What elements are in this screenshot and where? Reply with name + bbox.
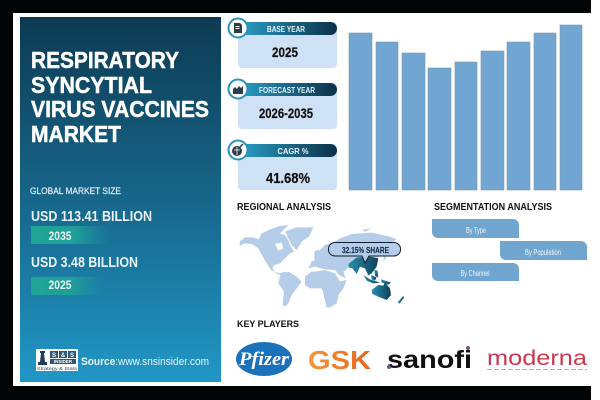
segment: by population	[500, 241, 587, 260]
world map	[240, 225, 404, 307]
logo: S&S Insider: Strategy & Stats	[37, 366, 78, 371]
year tag: 2035	[31, 226, 111, 244]
heading: segmentation analysis: SEGMENTATION ANALYSIS	[434, 201, 552, 213]
logo: S&S Insider	[36, 349, 78, 371]
card: base year: BASE YEAR	[267, 25, 305, 34]
card: forecast year	[228, 80, 337, 129]
logo: S&S Insider: S	[70, 353, 74, 359]
callout: share: 32.15% SHARE	[342, 245, 389, 255]
panel: market summary	[20, 17, 221, 382]
segment: by channel	[432, 263, 519, 281]
card: CAGR	[228, 140, 337, 190]
segment: by channel: By Channel	[460, 269, 490, 278]
logo: S&S Insider: INSIDER	[54, 359, 73, 364]
title: SYNCYTIAL	[31, 72, 152, 98]
logo: sanofi: sanofi	[387, 346, 472, 374]
value: 2035 market size: USD 113.41 BILLION	[31, 209, 152, 225]
card: base year	[228, 18, 337, 68]
logo: Pfizer: Pfizer	[238, 349, 290, 370]
segment: by population: By Population	[525, 248, 561, 257]
logo: S&S Insider: S	[52, 353, 56, 359]
card: CAGR: CAGR %	[278, 147, 308, 156]
title: VIRUS VACCINES	[31, 96, 209, 122]
year tag: 2035: 2035	[48, 229, 72, 243]
title: MARKET	[31, 121, 121, 147]
card: forecast year: FORECAST YEAR	[259, 86, 315, 95]
title	[31, 47, 209, 147]
segment: by type: By Type	[466, 226, 486, 235]
year tag: 2025	[31, 277, 105, 295]
card: base year: 2025	[272, 45, 298, 60]
title: RESPIRATORY	[31, 47, 179, 73]
source line: Source:www.snsinsider.com	[81, 356, 209, 368]
segment: by type	[432, 219, 519, 238]
logo: S&S Insider: &	[61, 353, 66, 359]
callout: share	[328, 242, 401, 263]
icon: globe chart	[228, 140, 248, 160]
year tag: 2025: 2025	[48, 278, 72, 292]
value: 2025 market size: USD 3.48 BILLION	[31, 255, 138, 271]
logo: GSK: GSK	[308, 345, 371, 375]
heading: key players: KEY PLAYERS	[237, 319, 299, 330]
icon: chart	[228, 80, 248, 98]
card: CAGR: 41.68%	[266, 171, 310, 187]
label: global market size: GLOBAL MARKET SIZE	[30, 186, 121, 197]
logo: Pfizer	[236, 342, 292, 376]
logo: moderna: moderna	[487, 347, 587, 370]
card: forecast year: 2026-2035	[259, 106, 313, 121]
icon: document	[228, 18, 248, 38]
bar chart	[349, 25, 582, 190]
heading: regional analysis: REGIONAL ANALYSIS	[237, 201, 331, 213]
